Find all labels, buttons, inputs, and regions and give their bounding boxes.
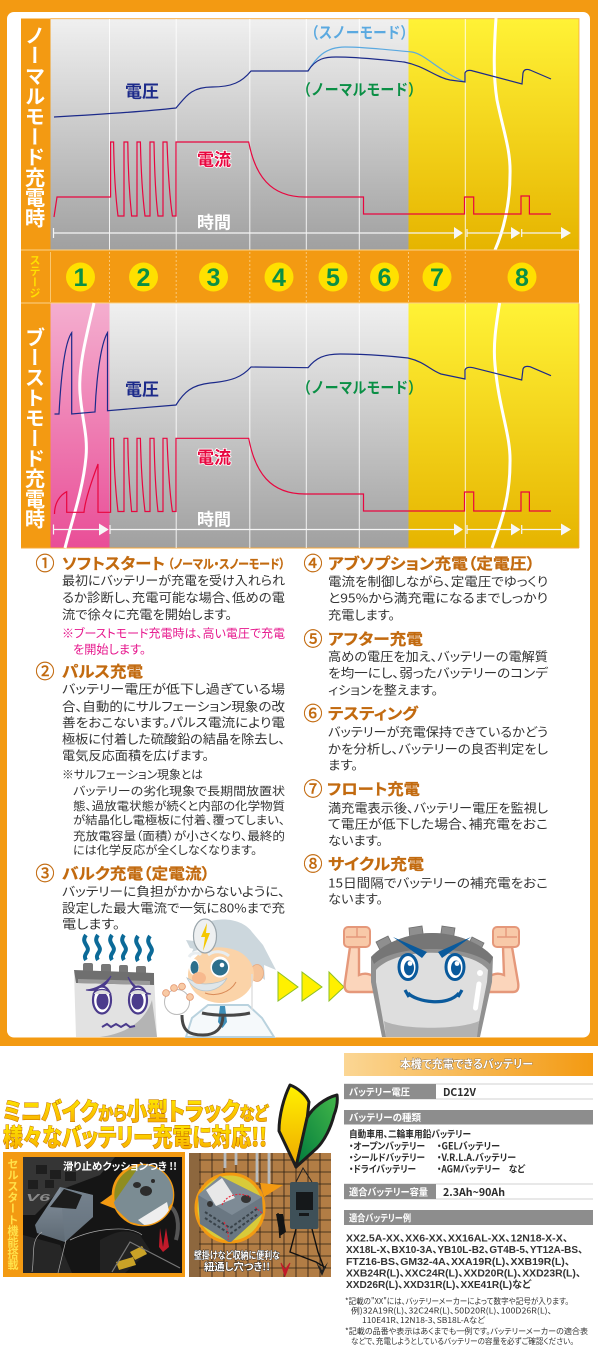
text block: stage 1 soft start: るか診断し、充電可能な場合、低めの電 — [62, 588, 285, 606]
heading: banner copy — [3, 1093, 269, 1154]
fists — [344, 927, 370, 947]
stage 7 badge: 7 — [430, 264, 444, 292]
chart background — [50, 18, 579, 250]
heading bar: 本機で充電できるバッテリー — [400, 1056, 533, 1072]
note: sulfation: 充放電容量（面積）が小さくなり、最終的 — [73, 828, 285, 844]
notes: 110E41R、12N18-3、SB18L-Aなど — [362, 1315, 486, 1326]
photo: charger in engine bay — [3, 1152, 185, 1277]
stage 8 badge: 8 — [515, 264, 529, 292]
text block: stage 8 cycle charge: ないます。 — [328, 890, 383, 908]
text block: stage 1 soft start: ① — [35, 549, 55, 576]
stage 3 badge: 3 — [207, 264, 220, 292]
text block: stage 5 after charge — [303, 624, 549, 698]
side heading: boost mode: ブーストモード充電時 — [20, 327, 50, 529]
note: sulfation: 態、過放電状態が続くと内部の化学物質 — [73, 798, 285, 814]
voltage curve, snow mode — [308, 47, 465, 82]
note: sulfation: バッテリーの劣化現象で長期間放置状 — [73, 783, 285, 799]
text block: stage 2 pulse charge: ② — [35, 657, 55, 684]
row: battery types: ・ドライバッテリー — [349, 1162, 416, 1176]
current curve — [54, 142, 551, 217]
label: time: 時間 — [197, 506, 231, 530]
label: voltage: 電圧 — [125, 78, 159, 102]
illustration: tired battery — [74, 935, 157, 1037]
text block: stage 8 cycle charge — [303, 850, 548, 908]
notes: 例)32A19R(L)、32C24R(L)、50D20R(L)、100D26R(L)、 — [351, 1306, 552, 1317]
illustration: doctor — [163, 919, 276, 1037]
label: current: 電流 — [197, 146, 231, 170]
text block: stage 6 testing — [303, 699, 549, 773]
text block: stage 1 soft start: ※ブーストモード充電時は、高い電圧で充電 — [62, 624, 285, 642]
voltage curve — [54, 333, 551, 414]
white content panel — [7, 12, 590, 1038]
callout: rubber feet — [100, 1165, 175, 1228]
text block: stage 4 absorption charge: アブソプション充電（定電圧） — [328, 552, 535, 574]
text block: stage 1 soft start — [35, 549, 286, 657]
text block: stage 2 pulse charge: 電気反応面積を広げます。 — [62, 746, 209, 764]
stage 4 badge: 4 — [272, 264, 286, 292]
text block: stage 8 cycle charge: ⑧ — [303, 850, 323, 876]
text block: stage 3 bulk charge: バルク充電（定電流） — [62, 862, 210, 884]
row: battery capacity: 2.3Ah~90Ah — [443, 1185, 505, 1200]
row: battery types: ・V.R.L.A.バッテリー — [437, 1150, 516, 1164]
text block: stage 2 pulse charge — [35, 657, 286, 858]
stage 1 badge — [66, 262, 95, 292]
side heading: normal mode: ノーマルモード充電時 — [20, 25, 50, 228]
row: battery types: バッテリーの種類 — [349, 1110, 421, 1124]
terminals — [376, 926, 484, 955]
caption: wall mount holes: 紐通し穴つき!! — [204, 1258, 270, 1274]
label: voltage: 電圧 — [125, 376, 159, 400]
stage 8 badge — [508, 262, 536, 292]
text block: stage 4 absorption charge — [303, 549, 548, 623]
text block: stage 5 after charge: を均一にし、弱ったバッテリーのコンデ — [328, 664, 549, 682]
chart background — [21, 303, 579, 548]
illustration: happy battery — [344, 926, 519, 1037]
caption: wall mount holes — [194, 1247, 280, 1274]
text block: stage 4 absorption charge: 電流を制御しながら、定電圧でゆっくり — [328, 572, 548, 590]
text block: stage 4 absorption charge: 充電します。 — [328, 605, 395, 623]
row: battery examples: XX18L-X、BX10-3A、YB10L-B2、GT4B-5、YT12A-BS、 — [346, 1245, 583, 1256]
text block: stage 2 pulse charge: 合、自動的にサルフェーション現象の改 — [62, 697, 286, 715]
panel: compatible batteries — [344, 1053, 593, 1347]
icon: beginner leaf mark — [279, 1085, 337, 1167]
arms — [345, 947, 374, 992]
text block: stage 5 after charge: ィションを整えます。 — [328, 680, 438, 698]
row: battery examples: 適合バッテリー例 — [349, 1210, 411, 1224]
row: battery examples: XXB24R(L)、XXC24R(L)、XXD20R(L)、XXD23R(L)、 — [346, 1268, 581, 1280]
icon: head mirror — [194, 919, 216, 953]
row: battery examples: XX2.5A-XX、XX6-XX、XX16AL-XX、12N18-X-X、 — [346, 1234, 568, 1244]
row: battery examples: FTZ16-BS、GM32-4A、XXA19R(L)、XXB19R(L)、 — [346, 1257, 570, 1268]
text block: stage 2 pulse charge: 極板に付着した硫酸鉛の結晶を除去し、 — [62, 730, 285, 748]
notes — [345, 1296, 588, 1347]
text block: stage 6 testing: ます。 — [328, 755, 358, 773]
side label: cell start: セルスタート機能搭載 — [5, 1158, 21, 1271]
notes: *記載の品番や表示はあくまでも一例です。バッテリーメーカーの適合表 — [345, 1326, 588, 1337]
text block: stage 2 pulse charge: 善をおこないます。パルス電流により電 — [62, 713, 285, 731]
text block: stage 6 testing: ⑥ — [303, 699, 323, 726]
row: battery types: ・GELバッテリー — [437, 1138, 500, 1152]
heading bar — [344, 1053, 593, 1076]
text block: stage 7 float charge — [303, 774, 549, 849]
callout: strap holes — [196, 1174, 283, 1243]
row: battery examples — [344, 1210, 593, 1291]
note: sulfation: が結晶化し電極板に付着、覆ってしまい、 — [73, 812, 285, 828]
orange page frame — [0, 0, 598, 1046]
stage 6 badge — [370, 262, 399, 292]
coat — [186, 1005, 274, 1037]
text block: stage 2 pulse charge: バッテリー電圧が低下し過ぎている場 — [62, 680, 285, 698]
label: time: 時間 — [197, 208, 231, 234]
text block: stage 7 float charge: ⑦ — [303, 774, 323, 802]
text block: stage 4 absorption charge: と95%から満充電になるまでしっかり — [328, 589, 548, 607]
row: battery types: ・オープンバッテリー — [349, 1138, 425, 1152]
stage 4 badge — [264, 262, 294, 292]
label: current: 電流 — [197, 444, 231, 468]
label: normal mode: （ノーマルモード） — [297, 78, 422, 100]
row: battery capacity — [344, 1184, 593, 1200]
panel: boost mode charging chart — [20, 303, 579, 548]
text block: stage 7 float charge: ないます。 — [328, 831, 383, 849]
time axis arrows — [54, 227, 571, 239]
caption: non-slip cushion: 滑り止めクッションつき !! — [63, 1158, 177, 1173]
notes: などで、充電しようとしているバッテリーの容量を必ずご確認ください。 — [351, 1336, 574, 1347]
text block: stage 1 soft start: 流で徐々に充電を開始します。 — [62, 605, 232, 623]
text block: stage 3 bulk charge — [35, 859, 285, 932]
stage 6 badge: 6 — [378, 264, 391, 292]
panel: stage band — [21, 250, 579, 304]
photo: charger in engine bay: V6 — [26, 1193, 51, 1204]
row: battery types: ・シールドバッテリー — [349, 1150, 425, 1164]
stage 2 badge: 2 — [137, 264, 150, 292]
heading: stage: ステージ — [27, 254, 43, 298]
note: sulfation — [62, 766, 285, 858]
row: battery capacity: 適合バッテリー容量 — [349, 1184, 428, 1198]
device — [290, 1182, 318, 1229]
text block: stage 1 soft start: を開始します。 — [73, 640, 146, 657]
stage 7 badge — [422, 262, 452, 292]
text block: stage 7 float charge: 満充電表示後、バッテリー電圧を監視し — [328, 799, 549, 817]
text block: stage 3 bulk charge: 電します。 — [62, 914, 120, 932]
hair — [186, 920, 276, 980]
text block: stage 4 absorption charge: ④ — [303, 549, 323, 576]
label: snow mode: （スノーモード） — [305, 21, 414, 43]
row: battery voltage: バッテリー電圧 — [349, 1084, 410, 1098]
text block: stage 1 soft start: 最初にバッテリーが充電を受け入れられ — [62, 571, 286, 589]
stage 5 badge: 5 — [326, 264, 340, 292]
text block: stage 2 pulse charge: パルス充電 — [62, 660, 144, 682]
text block: stage 3 bulk charge: ③ — [35, 859, 55, 886]
icon: heat waves — [84, 935, 152, 961]
note: sulfation: ※サルフェーション現象とは — [62, 766, 203, 782]
row: battery types: ・AGMバッテリー など — [437, 1162, 526, 1176]
text block: stage 6 testing: かを分析し、バッテリーの良否判定をし — [328, 739, 549, 757]
icon: stethoscope — [182, 1013, 250, 1035]
panel: normal mode charging chart — [20, 18, 579, 250]
text block: stage 7 float charge: フロート充電 — [327, 778, 421, 800]
heading: banner copy: ミニバイクから小型トラックなど — [3, 1093, 269, 1128]
voltage curve, normal mode — [54, 57, 551, 117]
row: battery examples: XXD26R(L)、XXD31R(L)、XXE41R(L)など — [346, 1278, 532, 1291]
heading: banner copy: 様々なバッテリー充電に対応!! — [3, 1119, 267, 1154]
stage 1 badge: 1 — [74, 264, 88, 292]
stage 2 badge — [129, 262, 158, 292]
body — [371, 933, 493, 1037]
note: sulfation: には化学反応が全くしなくなります。 — [73, 842, 257, 858]
row: battery types: 自動車用、二輪車用鉛バッテリー — [349, 1126, 471, 1140]
text block: stage 3 bulk charge: 設定した最大電流で一気に80%まで充 — [62, 899, 285, 917]
device — [35, 1187, 93, 1242]
stage 5 badge — [318, 262, 348, 292]
notes: *記載の"XX"には、バッテリーメーカーによって数字や記号が入ります。 — [345, 1296, 569, 1307]
time axis arrows — [54, 524, 571, 536]
caption: wall mount holes: 壁掛けなど収納に便利な — [194, 1247, 280, 1262]
text block: stage 7 float charge: て電圧が低下した場合、補充電をおこ — [328, 815, 548, 833]
photo: charger on pegboard — [189, 1153, 331, 1277]
row: battery types — [344, 1110, 593, 1176]
row: battery voltage — [344, 1084, 593, 1100]
text block: stage 8 cycle charge: 15日間隔でバッテリーの補充電をおこ — [328, 874, 548, 892]
row: battery voltage: DC12V — [443, 1085, 476, 1100]
text block: stage 5 after charge: ⑤ — [303, 624, 323, 652]
text block: stage 6 testing: テスティング — [328, 702, 419, 724]
text block: stage 6 testing: バッテリーが充電保持できているかどう — [328, 723, 548, 741]
arrows: three yellow triangles — [278, 972, 344, 1001]
current curve — [54, 438, 551, 514]
text block: stage 8 cycle charge: サイクル充電 — [328, 853, 425, 875]
label: normal mode: （ノーマルモード） — [297, 376, 422, 398]
stage 3 badge — [199, 262, 228, 292]
text block: stage 5 after charge: アフター充電 — [328, 628, 424, 650]
text block: stage 5 after charge: 高めの電圧を加え、バッテリーの電解質 — [328, 647, 548, 665]
text block: stage 1 soft start: ソフトスタート — [62, 552, 165, 574]
text block: stage 1 soft start: （ノーマル・スノーモード） — [168, 554, 285, 572]
text block: stage 3 bulk charge: バッテリーに負担がかからないように、 — [62, 882, 285, 900]
